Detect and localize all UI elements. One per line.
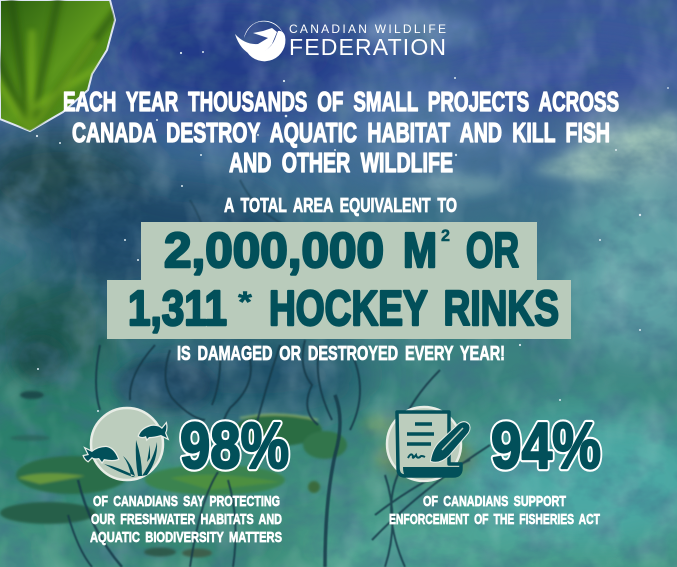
icon: fish and aquatic plants xyxy=(84,408,167,480)
number: 98% xyxy=(180,409,289,482)
lily pad leaf at top left xyxy=(0,0,120,132)
logo wordmark top: CANADIAN WILDLIFE xyxy=(289,22,446,36)
stat: 94% xyxy=(387,407,601,528)
caption: OUR FRESHWATER HABITATS AND xyxy=(91,512,282,528)
caption xyxy=(90,494,282,546)
number: 98% xyxy=(180,409,289,482)
logo wordmark bottom: FEDERATION xyxy=(289,34,446,60)
intro line: A TOTAL AREA EQUIVALENT TO xyxy=(224,194,457,217)
caption: ENFORCEMENT OF THE FISHERIES ACT xyxy=(389,512,600,528)
number: 94% xyxy=(491,409,601,482)
caption: AQUATIC BIODIVERSITY MATTERS xyxy=(90,530,282,546)
line: 1,311* hockey rinks xyxy=(128,282,559,336)
line: 2,000,000 m2 or xyxy=(164,224,519,278)
icon: loon crest xyxy=(235,21,285,61)
number: 94% xyxy=(491,409,601,482)
highlight boxes xyxy=(107,222,571,339)
logo: Canadian Wildlife Federation xyxy=(235,21,446,61)
stems xyxy=(68,180,490,567)
caption: OF CANADIANS SUPPORT xyxy=(423,494,566,510)
line: 1,311* hockey rinks: 1,311 xyxy=(128,282,227,336)
closing line: IS DAMAGED OR DESTROYED EVERY YEAR! xyxy=(177,342,505,365)
line: 2,000,000 m2 or: M xyxy=(403,224,437,278)
stat: 98% xyxy=(84,408,289,546)
line: 1,311* hockey rinks: * xyxy=(238,286,252,319)
line: 2,000,000 m2 or: 2,000,000 xyxy=(164,224,384,278)
caption: OF CANADIANS SAY PROTECTING xyxy=(93,494,280,510)
line: 2,000,000 m2 or: 2 xyxy=(441,226,450,245)
title xyxy=(63,86,619,178)
speckles xyxy=(36,51,669,412)
lily pads xyxy=(0,391,347,558)
line: 2,000,000 m2 or: OR xyxy=(466,224,519,278)
highlighted statistic xyxy=(107,222,571,339)
caption xyxy=(389,494,600,528)
line: 1,311* hockey rinks: HOCKEY RINKS xyxy=(269,282,559,336)
title: AND OTHER WILDLIFE xyxy=(229,147,453,178)
icon: document and quill xyxy=(387,407,470,481)
